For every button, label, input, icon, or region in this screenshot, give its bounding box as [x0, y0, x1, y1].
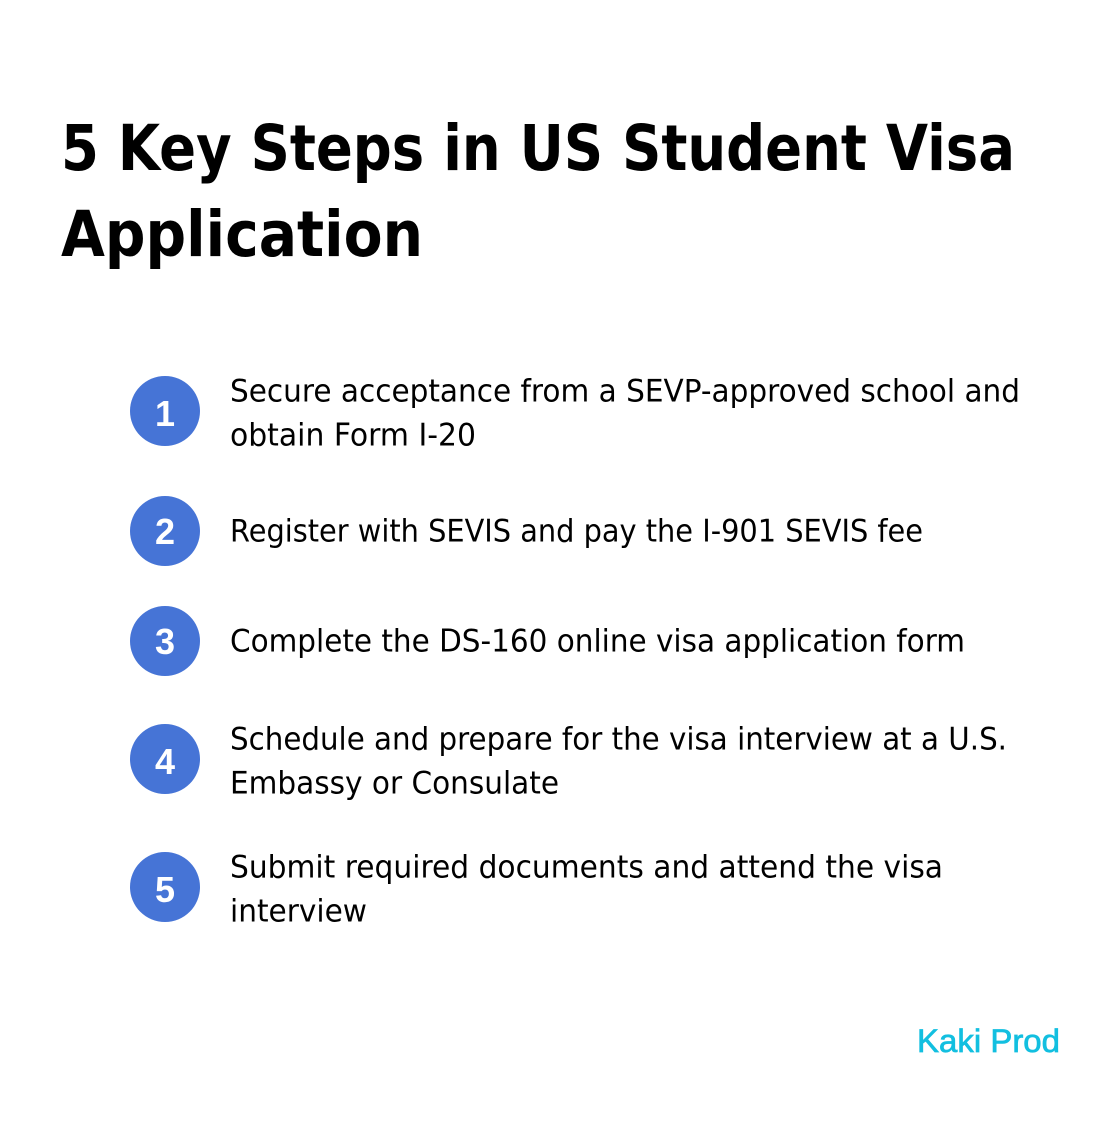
- step 5 text: [230, 850, 943, 930]
- step 4: [130, 722, 1007, 802]
- step 1 text: obtain Form I-20: [230, 418, 476, 454]
- step 4 text: Schedule and prepare for the visa interview at a U.S.: [230, 722, 1007, 758]
- step 2 text: Register with SEVIS and pay the I-901 SEVIS fee: [230, 514, 923, 550]
- step 3 text: Complete the DS-160 online visa application form: [230, 624, 965, 660]
- title: Application: [61, 198, 423, 271]
- icon: number 5 badge: 5: [155, 869, 175, 910]
- icon: number 3 badge: 3: [155, 621, 175, 662]
- icon: number 3 badge: [130, 606, 200, 676]
- icon: number 5 badge: [130, 852, 200, 922]
- logo: Kaki Prod: Kaki Prod: [917, 1023, 1060, 1059]
- icon: number 4 badge: 4: [155, 741, 175, 782]
- icon: number 4 badge: [130, 724, 200, 794]
- step 4 text: [230, 722, 1007, 802]
- icon: number 2 badge: [130, 496, 200, 566]
- icon: number 1 badge: 1: [155, 393, 175, 434]
- step 5: [130, 850, 943, 930]
- step 5 text: Submit required documents and attend the visa: [230, 850, 943, 886]
- step 3: [130, 606, 965, 676]
- step 1 text: Secure acceptance from a SEVP-approved school and: [230, 374, 1020, 410]
- step 1 text: [230, 374, 1020, 454]
- step 4 text: Embassy or Consulate: [230, 766, 559, 802]
- step 5 text: interview: [230, 894, 367, 930]
- title: [61, 112, 1015, 271]
- icon: number 1 badge: [130, 376, 200, 446]
- step 1: [130, 374, 1020, 454]
- step 2: [130, 496, 923, 566]
- icon: number 2 badge: 2: [155, 511, 175, 552]
